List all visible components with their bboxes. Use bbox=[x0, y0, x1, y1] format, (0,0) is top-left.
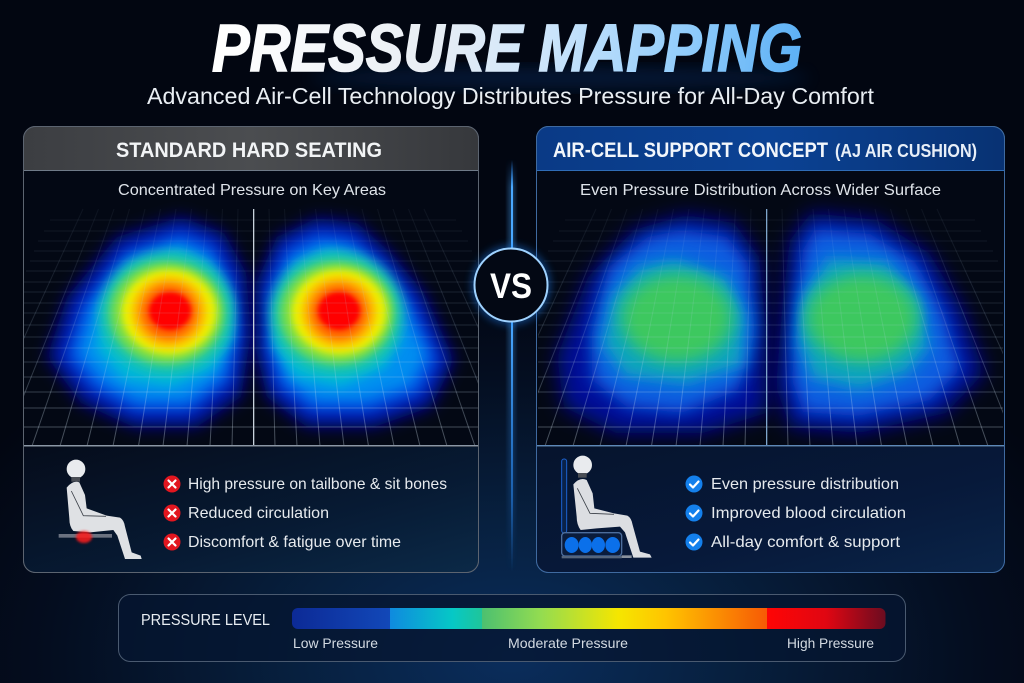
icon: red cross bbox=[164, 504, 180, 522]
label: low: Low Pressure bbox=[293, 635, 378, 651]
text: reduced circulation: Reduced circulation bbox=[188, 505, 329, 522]
text: all-day comfort: All-day comfort & support bbox=[711, 534, 901, 551]
heat map: even pressure bbox=[538, 200, 1003, 445]
icon: blue check bbox=[686, 534, 702, 550]
panel header: air-cell support bbox=[537, 127, 1004, 171]
panel subheading: Even Pressure Distribution Across Wider Surface bbox=[580, 182, 941, 199]
panel: air-cell support concept bbox=[536, 126, 1005, 573]
icon: red cross bbox=[164, 534, 180, 550]
icon: red cross bbox=[164, 476, 180, 492]
lower section background bbox=[24, 447, 478, 572]
panel header: air-cell support: AIR-CELL SUPPORT CONCEPT bbox=[553, 139, 828, 162]
icon: blue check bbox=[686, 476, 702, 492]
VS divider line bbox=[508, 160, 515, 572]
icon: seated person on air cushion bbox=[562, 456, 652, 558]
subtitle: Advanced Air-Cell Technology Distributes Pressure for All-Day Comfort bbox=[147, 83, 874, 109]
legend label: PRESSURE LEVEL bbox=[141, 612, 270, 629]
label: high: High Pressure bbox=[787, 635, 874, 651]
panel: standard hard seating bbox=[23, 126, 479, 573]
panel header: air-cell support: (AJ AIR CUSHION) bbox=[835, 141, 977, 161]
text: high pressure: High pressure on tailbone & sit bones bbox=[188, 476, 447, 493]
gradient scale bar bbox=[292, 608, 886, 629]
text: discomfort: Discomfort & fatigue over time bbox=[188, 534, 401, 551]
icon: blue check bbox=[686, 504, 702, 522]
legend: pressure level bbox=[118, 594, 906, 662]
heat map: concentrated pressure bbox=[24, 207, 478, 445]
left even pressure zone bbox=[557, 215, 766, 433]
text: improved circulation: Improved blood circulation bbox=[711, 505, 906, 522]
panel header: standard hard seating: STANDARD HARD SEATING bbox=[116, 139, 382, 162]
text: even pressure: Even pressure distribution bbox=[711, 476, 899, 493]
panel subheading: Concentrated Pressure on Key Areas bbox=[118, 182, 386, 199]
panel header: standard hard seating bbox=[24, 127, 478, 171]
VS badge: VS bbox=[490, 267, 532, 306]
VS badge bbox=[471, 245, 551, 325]
icon: seated person on hard seat bbox=[59, 460, 142, 559]
left seat bone hot spot bbox=[47, 217, 251, 427]
bullets: drawbacks bbox=[164, 476, 447, 551]
right even pressure zone bbox=[776, 213, 984, 433]
lower section background bbox=[537, 447, 1004, 572]
title: PRESSURE MAPPING bbox=[212, 11, 802, 86]
label: moderate: Moderate Pressure bbox=[508, 635, 628, 651]
right seat bone hot spot bbox=[256, 218, 454, 427]
bullets: benefits bbox=[686, 476, 906, 551]
